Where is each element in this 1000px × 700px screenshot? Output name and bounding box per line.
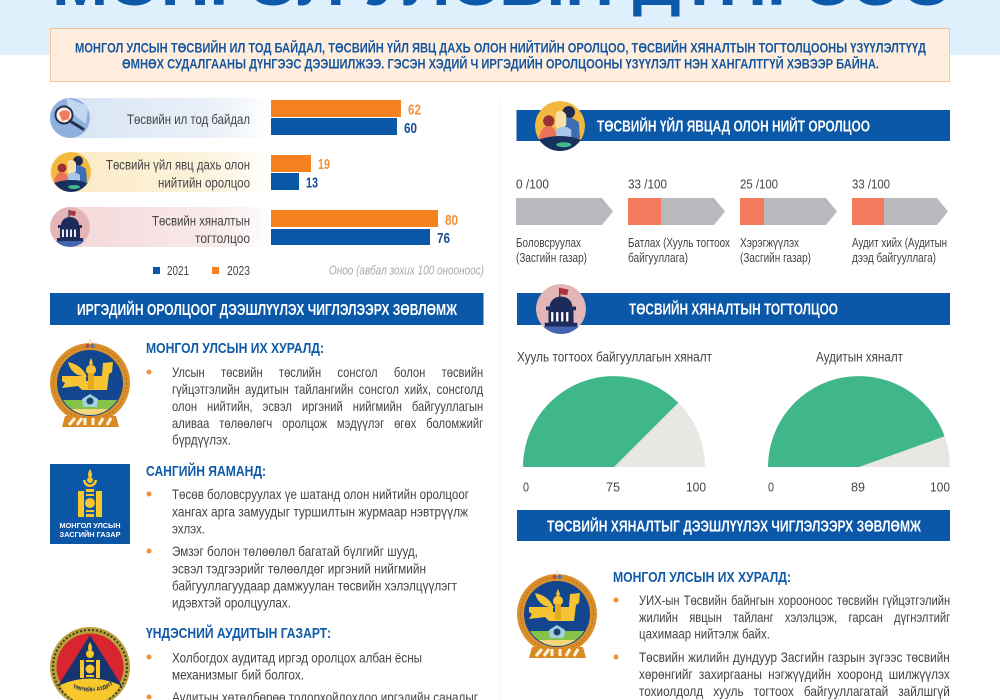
row: budget oversight: 76 — [437, 230, 450, 247]
stage: execution 25/100 — [740, 176, 837, 265]
recommendation: parliament: жилийн явцын тайланг хэлэлцэж, гарсан дүгнэлтийг — [639, 608, 950, 624]
heading banner — [517, 293, 950, 325]
gauge: audit oversight 89: 0 — [768, 480, 774, 494]
row: budget transparency: 60 — [404, 120, 417, 137]
recommendation: ministry of finance — [146, 462, 469, 610]
row: budget transparency: 62 — [408, 102, 421, 118]
stage: approval 33/100: 33 /100 — [628, 176, 667, 192]
icon: state emblem — [50, 339, 130, 427]
row: budget transparency: Төсвийн ил тод байдал — [127, 111, 250, 127]
recommendation: ministry of finance: Эмзэг болон төлөөлөл багатай бүлгийг шууд, — [172, 543, 418, 559]
row: public participation: 13 — [306, 174, 318, 192]
panel: budget oversight system — [517, 284, 950, 494]
recommendation: parliament: МОНГОЛ УЛСЫН ИХ ХУРАЛД: — [613, 569, 791, 586]
stage: drafting 0/100: 0 /100 — [516, 176, 549, 192]
gauge: legislative oversight 75: 0 — [523, 480, 529, 494]
recommendation: parliament: хөрөнгийг захиргааны нэгжүүдийн хооронд шилжүүлэх — [639, 666, 950, 682]
gauge: audit oversight 89 — [768, 348, 950, 494]
recommendation: parliament: Төсвийн жилийн дундуур Засгийн газрын зүгээс төсвийн — [639, 648, 950, 664]
recommendation: parliament — [146, 340, 484, 448]
heading banner: ИРГЭДИЙН ОРОЛЦООГ ДЭЭШЛҮҮЛЭХ ЧИГЛЭЛЭЭРХ ЗӨВЛӨМЖ — [77, 301, 458, 319]
recommendation: national audit office — [146, 624, 478, 700]
recommendation: ministry of finance: хангах арга замуудыг туршилтын журмаар нэвтрүүлж — [172, 504, 469, 520]
legend: 2021 — [167, 263, 189, 278]
heading banner — [50, 293, 484, 325]
gauge: audit oversight 89: 89 — [851, 480, 865, 494]
row: public participation: Төсвийн үйл явц дахь олон — [106, 156, 250, 172]
recommendation: parliament: цахимаар нийтэлж байх. — [639, 626, 770, 642]
stage: approval 33/100: байгууллага) — [628, 251, 688, 265]
row: budget oversight: Төсвийн хяналтын — [152, 212, 250, 228]
row: budget oversight: 80 — [445, 212, 458, 229]
icon: government logo — [50, 464, 130, 544]
recommendation: parliament: аливаа төлөөлөгч оролцож мэдүүлэг өгөх боломжийг — [172, 414, 483, 430]
gauge: legislative oversight 75 — [517, 348, 712, 494]
stage: drafting 0/100: Боловсруулах — [516, 236, 582, 250]
recommendation: ministry of finance: Төсөв боловсруулах үе шатанд олон нийтийн оролцоог — [172, 486, 469, 502]
row: public participation: 19 — [318, 156, 330, 173]
row: public participation: нийтийн оролцоо — [158, 174, 250, 190]
recommendation: parliament — [613, 569, 950, 700]
heading banner — [517, 510, 950, 541]
recommendation: parliament: тохиолдолд хууль тогтоох байгууллагатай зайлшгүй — [639, 682, 950, 698]
stage: drafting 0/100: (Засгийн газар) — [516, 251, 587, 265]
intro callout — [50, 28, 950, 82]
stage: audit 33/100: 33 /100 — [852, 176, 890, 192]
icon: government building — [50, 207, 90, 247]
icon: magnifier — [50, 98, 90, 138]
header band — [0, 0, 1000, 55]
icon: government logo: МОНГОЛ УЛСЫН — [60, 523, 120, 530]
icon: people — [532, 101, 588, 158]
recommendation: parliament: МОНГОЛ УЛСЫН ИХ ХУРАЛД: — [146, 340, 324, 357]
icon: state emblem — [517, 570, 597, 658]
recommendation: ministry of finance: байгууллагуудаар дамжуулан төсвийн хэлэлцүүлэгт — [172, 578, 457, 594]
recommendation: parliament: УИХ-ын Төсвийн байнгын хорооноос төсвийн гүйцэтгэлийн — [639, 592, 950, 608]
gauge: legislative oversight 75: Хууль тогтоох байгууллагын хяналт — [517, 348, 712, 364]
row: public participation — [49, 152, 330, 198]
recommendation: parliament: бүрдүүлэх. — [172, 432, 231, 448]
recommendation: parliament: Улсын төсвийн төслийн сонсгол болон төсвийн — [172, 364, 483, 380]
gauge: audit oversight 89: Аудитын хяналт — [816, 348, 903, 364]
panel: budget oversight recommendations — [517, 510, 950, 700]
stage: audit 33/100: дээд байгууллага) — [852, 251, 936, 265]
panel: public participation in budget cycle — [516, 101, 950, 265]
stage: execution 25/100: 25 /100 — [740, 176, 778, 192]
row: budget oversight: тогтолцоо — [195, 230, 250, 246]
stage: audit 33/100 — [852, 176, 948, 265]
icon: audit office emblem: ТӨРИЙН АУДИТ — [74, 682, 112, 692]
icon: audit office emblem — [50, 627, 130, 700]
stage: execution 25/100: (Засгийн газар) — [740, 251, 811, 265]
icon: government building — [536, 284, 586, 334]
row: budget oversight — [50, 207, 458, 247]
legend — [153, 263, 250, 278]
stage: drafting 0/100 — [516, 176, 613, 265]
bar chart: scores 2021 vs 2023 — [49, 98, 484, 278]
stage: approval 33/100 — [628, 176, 731, 265]
gauge: audit oversight 89: 100 — [930, 480, 950, 494]
recommendation: ministry of finance: эхлэх. — [172, 520, 205, 536]
recommendation: ministry of finance: эсвэл тэдгээрийг төлөөлдөг иргэний нийгмийн — [172, 560, 426, 576]
stage: approval 33/100: Батлах (Хууль тогтоох — [628, 236, 731, 250]
recommendation: parliament: гүйцэтгэлийн аудитын тайлангийн сонсгол хийх, сонсголд — [172, 380, 483, 396]
heading banner — [516, 110, 950, 141]
recommendation: national audit office: механизмыг бий болгох. — [172, 666, 304, 682]
panel: citizen participation recommendations — [50, 293, 524, 700]
recommendation: ministry of finance: САНГИЙН ЯАМАНД: — [146, 462, 266, 480]
stage: execution 25/100: Хэрэгжүүлэх — [740, 236, 800, 250]
axis note: Оноо (авбал зохих 100 онооноос) — [329, 264, 484, 278]
row: budget transparency — [50, 98, 421, 138]
recommendation: ministry of finance: идэвхтэй оролцуулах. — [172, 594, 291, 610]
legend: 2023 — [227, 263, 250, 278]
icon: government logo: ЗАСГИЙН ГАЗАР — [60, 530, 121, 539]
gauge: legislative oversight 75: 75 — [606, 480, 620, 494]
heading banner: ТӨСВИЙН ХЯНАЛТЫН ТОГТОЛЦОО — [629, 300, 838, 318]
gauge: legislative oversight 75: 100 — [686, 480, 706, 494]
heading banner: ТӨСВИЙН ҮЙЛ ЯВЦАД ОЛОН НИЙТ ОРОЛЦОО — [597, 118, 870, 136]
icon: people — [49, 152, 93, 198]
recommendation: national audit office: ҮНДЭСНИЙ АУДИТЫН ГАЗАРТ: — [146, 624, 331, 642]
recommendation: national audit office: Холбогдох аудитад иргэд оролцох албан ёсны — [172, 650, 422, 666]
recommendation: parliament: олон нийтийн, эсвэл иргэний нийгмийн байгууллагын — [172, 398, 483, 414]
stage: audit 33/100: Аудит хийх (Аудитын — [852, 236, 947, 250]
